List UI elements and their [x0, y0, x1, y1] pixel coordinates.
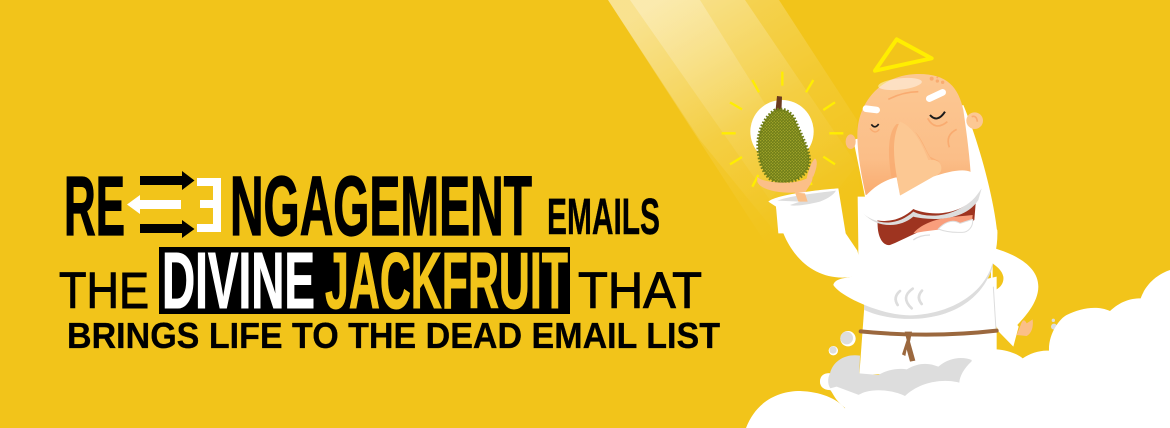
light beam	[608, 0, 860, 250]
belt knot	[902, 332, 915, 362]
mustache top	[863, 170, 981, 221]
robe edge shadow	[993, 287, 996, 330]
word: NGAGEMENT: NGAGEMENT	[230, 159, 532, 253]
beard	[833, 197, 997, 315]
hair back	[853, 105, 997, 233]
head	[846, 39, 997, 233]
cloud lower-left filler	[830, 387, 863, 410]
right eyebrow	[929, 92, 943, 99]
word: EMAILS: EMAILS	[547, 188, 660, 245]
arm, hand and jackfruit	[722, 72, 863, 278]
right arm sleeve	[990, 248, 1038, 347]
icon: arrows forming letter E	[127, 171, 194, 238]
nose outline shadow	[889, 124, 940, 195]
left ear	[846, 134, 856, 149]
glow rays	[722, 72, 843, 187]
title line 2: the divine jackfruit that	[59, 236, 702, 325]
fruit stem	[775, 96, 782, 113]
title line 1: re-engagement emails	[64, 159, 660, 253]
beard folds	[896, 289, 922, 308]
robe body	[859, 277, 997, 375]
hand back finger	[807, 158, 817, 178]
word: RE: RE	[64, 159, 125, 253]
subtitle: BRINGS LIFE TO THE DEAD EMAIL LIST	[67, 315, 720, 356]
glowing white circle	[750, 100, 814, 163]
face	[857, 74, 971, 195]
icon: white reversed E	[197, 178, 221, 232]
grey cloud	[820, 355, 972, 410]
robe and lower body	[746, 197, 1170, 428]
jackfruit	[758, 109, 809, 183]
bubbles	[829, 319, 1057, 355]
belt	[861, 331, 997, 335]
cheek line	[948, 129, 957, 147]
character: old man with jackfruit	[722, 39, 1170, 428]
forehead shine	[878, 76, 922, 92]
mouth cavity	[877, 203, 976, 245]
lip crease	[913, 235, 930, 240]
word: THAT: THAT	[578, 262, 702, 319]
skin arm in sleeve	[795, 193, 808, 202]
left eyebrow	[866, 109, 877, 110]
hand palm	[757, 175, 813, 203]
word: JACKFRUIT: JACKFRUIT	[325, 236, 568, 325]
black highlight box	[159, 247, 570, 314]
mustache shadow	[863, 188, 982, 225]
beard shadow	[863, 263, 993, 319]
right ear	[966, 112, 983, 129]
tongue	[913, 215, 973, 233]
forehead wrinkle	[888, 92, 918, 99]
left eye	[871, 124, 879, 127]
teeth	[938, 219, 973, 232]
age spots	[930, 76, 944, 84]
left sleeve bottom	[776, 207, 863, 278]
mouth	[877, 203, 976, 245]
right eye	[930, 112, 945, 118]
word: THE: THE	[59, 262, 149, 319]
raised sleeve	[768, 188, 846, 233]
mustache	[863, 170, 982, 225]
word: DIVINE: DIVINE	[162, 236, 315, 325]
halo	[875, 39, 932, 71]
foreground cloud	[746, 270, 1170, 428]
nose	[894, 122, 941, 196]
hand on hip	[1017, 319, 1033, 336]
